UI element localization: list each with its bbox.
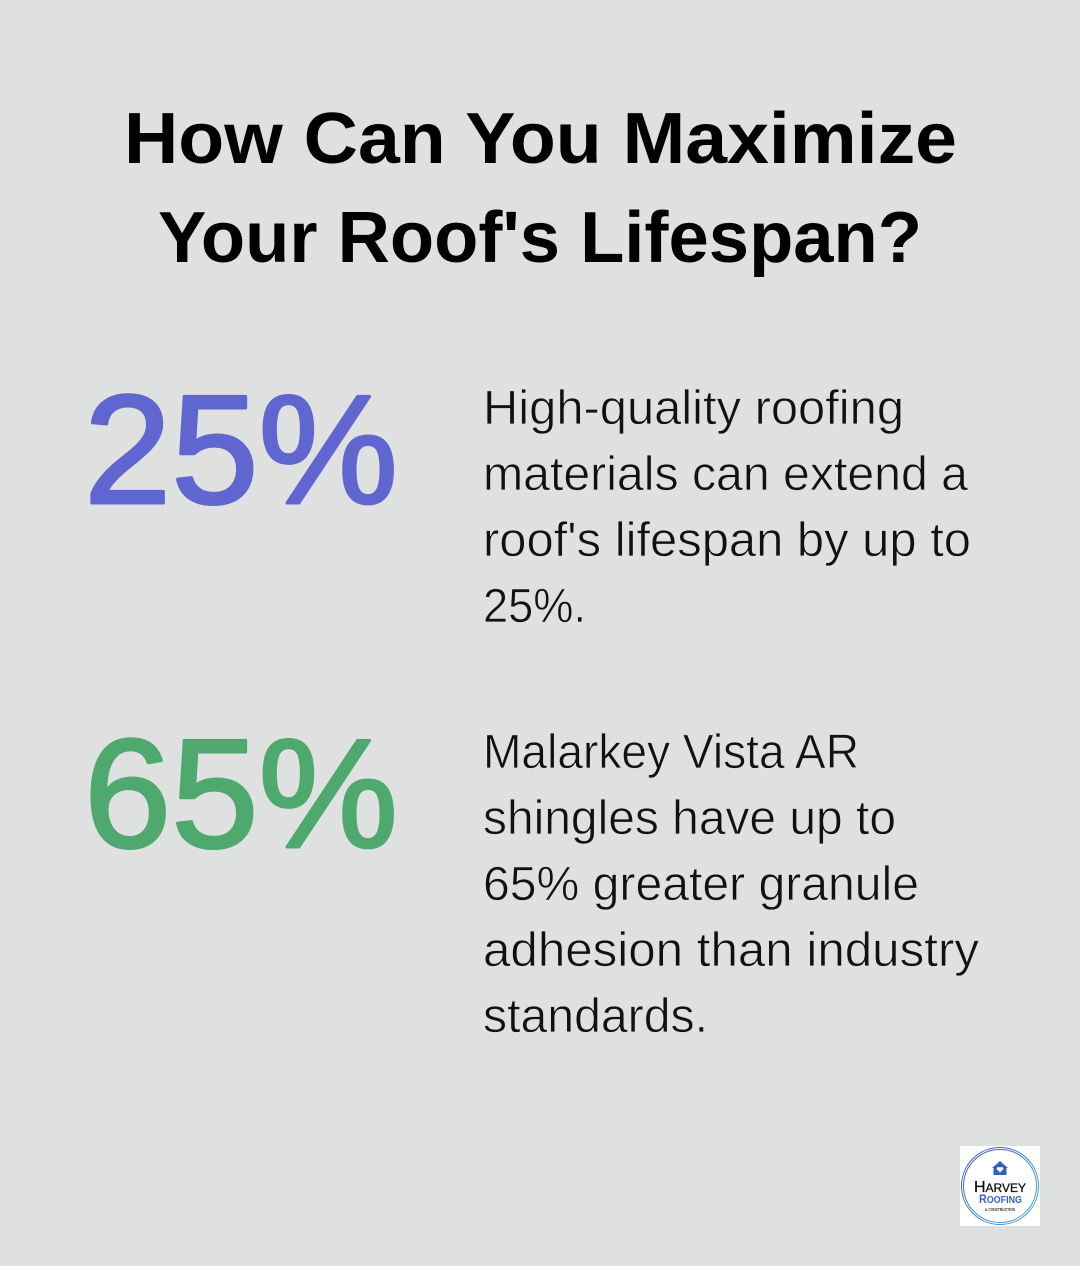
text block: Malarkey Vista AR shingles: shingles have up to [483,792,896,845]
text block: high-quality materials: materials can extend a [483,448,968,501]
text block: Malarkey Vista AR shingles: standards. [483,990,708,1043]
title: Your Roof's Lifespan? [158,198,922,278]
text block: high-quality materials: roof's lifespan by up to [483,514,971,567]
text block: Malarkey Vista AR shingles [483,726,979,1043]
text block: Malarkey Vista AR shingles: adhesion than industry [483,924,979,977]
text block: high-quality materials: High-quality roofing [483,382,904,435]
stat: 65%: 65% [84,707,398,880]
stat: 25%: 25% [84,363,398,536]
icon: house with heart [992,1161,1008,1175]
logo: Harvey Roofing & Construction: ROOFING [979,1192,1022,1206]
title [124,99,957,278]
logo: Harvey Roofing & Construction: & CONSTRUCTION [985,1207,1015,1212]
logo: Harvey Roofing & Construction [960,1146,1040,1226]
text block: high-quality materials: 25%. [483,580,586,633]
text block: high-quality materials [483,382,971,633]
logo: Harvey Roofing & Construction: HARVEY [974,1179,1026,1196]
text block: Malarkey Vista AR shingles: Malarkey Vista AR [483,726,859,779]
title: How Can You Maximize [124,99,957,179]
text block: Malarkey Vista AR shingles: 65% greater granule [483,858,919,911]
